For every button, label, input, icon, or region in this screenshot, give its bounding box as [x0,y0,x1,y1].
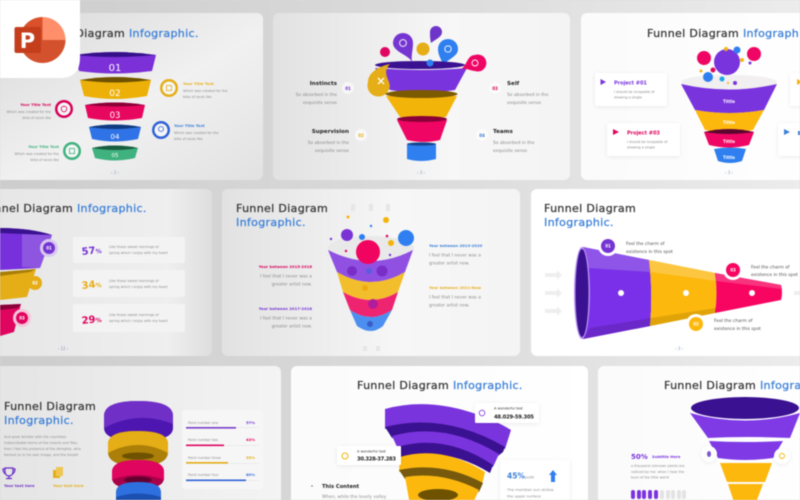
label: self: Self [507,81,520,87]
text: yellow callout: bliss of souls like [183,95,212,99]
funnel with bubbles: Tittle [723,155,735,160]
label: supervision [308,129,367,154]
heading: Funnel Diagram [236,202,328,215]
funnel with bubbles: Tittle [723,120,735,125]
text: green callout: Which was created for the [14,152,59,156]
label: self: 03 [492,86,498,91]
text: this content: When, while the lovely valley [322,494,387,500]
badge 03 [723,260,743,280]
ring 03 [85,102,145,121]
text: green callout: Your Title Text [27,144,59,149]
card: project 04 [778,123,800,156]
label: self: exquisite sense [507,100,541,106]
text: pink callout: bliss of souls like [22,116,51,120]
open funnel [690,396,800,500]
text: 2015-2016 [258,264,312,288]
text: 2017-2018: Year between 2017-2018 [258,306,312,311]
label: supervision: 02 [358,133,364,138]
page number: ‹ 3 › [725,170,734,175]
text: 2021-Now: I feel that I never was a [429,294,481,300]
page number: ‹ 3 › [417,170,426,175]
text: 2019-2020 [428,243,483,266]
card: 30.328-37.283: 30.328-37.283 [357,456,396,462]
text: blue callout: bliss of souls like [174,137,203,141]
card: project 03: drawing a single [627,146,655,150]
card: project 03 [607,123,680,156]
card: 29 percent: spring which I enjoy with my heart [109,319,168,323]
heading: Funnel Diagram Infographic. [33,27,199,40]
card: 29 percent [73,304,185,332]
label: supervision: Supervision [312,129,349,135]
card: project 01: I should be incapable of [614,90,655,94]
panel: sideways cone funnel [531,189,800,356]
text: callout 01: existence in this spot [626,249,673,255]
spiral funnel [385,404,511,500]
text: 2019-2020: I feel that I never was a [429,252,481,258]
label: teams: exquisite sense [493,148,527,154]
heading: Infographic. [236,216,306,229]
label: self [489,81,549,106]
stat heading: Subtitle Here [652,454,681,459]
icon: yellow badge [160,79,178,97]
label: teams: Teams [493,129,513,135]
card: 34 percent [73,270,185,297]
stat description: noticed by me: when I hear the [631,470,684,474]
text: 2017-2018: greater artist now. [272,324,312,330]
badge 03 [13,309,31,327]
card: project 01: drawing a single [614,96,642,100]
stat description: buzz of the little world [631,476,669,480]
card: 30.328-37.283: A wonderful test [357,450,386,454]
icon: green badge [63,142,81,160]
label: instincts [296,81,354,106]
badge 02: 02 [32,280,38,286]
label: instincts: So absorbed in the [296,92,337,98]
card: 30.328-37.283 [337,446,401,465]
row: point number two: 43% [246,437,255,442]
row: point number three [186,455,259,464]
funnel with droplets [367,26,486,161]
text: callout 02: existence in this spot [714,326,761,332]
ring 01 [75,52,156,74]
text: pink callout: Which was created for the [6,110,51,114]
text: 2017-2018: I feel that I never was a [260,316,312,322]
ring 05 [92,146,138,160]
card: 34 percent: Like these sweet mornings of [109,279,159,283]
badge 02 [28,276,42,290]
badge 01: 01 [46,246,52,250]
text: green callout [14,144,59,162]
funnel with bubbles [681,46,777,163]
text: this content [311,484,387,500]
panel: funnel with project cards [581,13,800,180]
badge 03: 03 [19,316,25,320]
card: 29 percent: Like these sweet mornings of [109,313,159,317]
row: point number four: Point number four [188,473,219,477]
panel: open funnel with people stat [598,366,800,500]
ring 02 [80,77,151,99]
text: yellow callout: Your Title Text [182,81,214,86]
badge 01: 01 [605,244,611,248]
ring 02: 02 [109,89,121,99]
panel: top left funnel with five stacked rings [0,13,263,180]
card: 57 percent: Like these sweet mornings of [109,245,159,249]
panel: horizontal percent funnel [0,189,212,356]
heading: Funnel Diagram Infographic. [357,379,523,392]
body text: And grow familiar with the countless [4,435,66,439]
text: 2019-2020: greater artist now. [429,260,469,266]
text: callout 03: existence in this spot [751,272,798,278]
badge 02: 02 [693,322,699,326]
row: point number two [186,437,259,446]
text: callout 01: Feel the charm of [626,242,664,247]
faded arrows [351,204,390,351]
funnel with bubbles: Tittle [723,139,735,144]
card: 45 percent profit: profit [525,476,535,480]
text: 2015-2016: greater artist now. [272,282,312,288]
faded arrows [545,270,800,316]
heading: Infographic. [4,414,74,427]
label: teams: 04 [479,133,485,138]
card: 45 percent profit: the upper surface [507,494,541,498]
ring 05: 05 [112,153,119,159]
text: pink callout: Your Title Text [19,102,51,107]
text: pink callout [6,102,51,120]
logo card: PowerPoint [0,0,80,78]
icon: PowerPoint logo: P [20,29,35,53]
badge 02 [686,314,706,334]
page number: ‹ 3 › [675,346,684,351]
text: 2017-2018 [258,306,312,330]
translucent funnel [328,216,414,331]
card: 34 percent: spring which I enjoy with my heart [109,285,168,289]
sideways cone [574,247,782,339]
body text: then I feel the presence of the Almighty, who [4,447,81,451]
ring 03: 03 [110,111,120,121]
row: point number four [186,472,259,481]
row: point number one: 57% [246,420,255,425]
stat heading: 50% [631,453,648,461]
badge 01 [40,239,58,257]
label: supervision: So absorbed in the [308,140,349,146]
card: 57 percent: spring which I enjoy with my heart [109,251,168,255]
card: progress bars [182,410,263,489]
card: 48.029-59.305: 48.029-59.305 [494,414,534,420]
page number: ‹ 12 › [58,346,69,351]
label: teams: So absorbed in the [493,140,535,146]
text: callout 03: Feel the charm of [751,266,789,270]
row: point number two: Point number two [188,438,218,442]
page number: ‹ 2 › [111,170,120,175]
card: 34 percent: 34% [81,279,102,292]
panel: stacked cylinders with progress bars [0,366,281,500]
icon: documents [53,467,63,478]
card: 57 percent: 57% [81,245,102,258]
card: 48.029-59.305: A wonderful test [494,406,523,410]
text: 2021-Now [428,285,481,308]
stacked cylinders [104,401,173,500]
card: project 03: Project #03 [627,130,660,136]
label: self: So absorbed in the [507,92,549,98]
label: your text yellow: Your text here [52,483,84,488]
text: 2015-2016: I feel that I never was a [260,274,312,280]
badge 03: 03 [730,268,736,272]
card: project 01: Project #01 [614,80,647,86]
card: 45 percent profit: 45% [507,472,525,480]
row: point number one [186,420,259,429]
text: 2021-Now: Year between 2021-Now [428,285,481,290]
card: 45 percent profit: The meridian sun strikes [506,487,554,492]
badge 01 [598,236,618,256]
text: yellow callout [182,81,228,99]
card: 45 percent profit [500,460,570,500]
body text: indescribable forms of the insects and flies, [4,441,78,445]
label: supervision: exquisite sense [315,148,349,154]
icon: trophy [3,468,15,478]
text: 2021-Now: greater artist now. [429,302,469,308]
label: instincts: Instincts [310,81,338,87]
stat heading [631,453,681,461]
heading: Funnel Diagram [4,400,96,413]
text: 2019-2020: Year between 2019-2020 [428,243,483,248]
label: instincts: exquisite sense [303,100,337,106]
ring 04: 04 [111,133,120,141]
heading: Funnel Diagram [544,202,636,215]
icon: yellow chat badge [774,448,790,464]
heading: Infographic. [544,216,614,229]
label: your text purple: Your text here [3,483,35,488]
text: green callout: bliss of souls like [30,158,59,162]
text: blue callout [173,123,219,141]
text: 2015-2016: Year between 2015-2016 [258,264,312,269]
stat description: a thousand unknown plants are [631,464,685,468]
body text [4,435,81,457]
panel: spiral funnel with stat cards [291,366,588,500]
label: teams [476,129,535,154]
row: point number three: Point number three [188,456,221,460]
card: project 01 [595,73,667,106]
label: instincts: 01 [345,86,351,91]
ring 04 [89,124,141,142]
card: project 03: I should be incapable of [627,140,668,144]
card: 57 percent [73,237,185,263]
text: this content: This Content [322,484,360,490]
card: 29 percent: 29% [81,314,102,327]
row: point number three: 55% [246,455,255,460]
icon row: people [631,490,686,499]
icon: purple person badge [701,446,717,462]
text: blue callout: Which was created for the [174,131,219,135]
card: 48.029-59.305 [475,403,539,423]
row: point number four: 80% [246,472,255,477]
icon: pink badge [55,100,73,118]
row: point number one: Point number one [188,421,218,425]
text: callout 02: Feel the charm of [714,319,752,324]
text: blue callout: Your Title Text [173,123,205,128]
funnel with bubbles: Tittle [723,99,735,104]
icon: purple badge [50,56,70,76]
body text: formed us in his own image, and the breath [4,453,78,457]
stat description [631,464,685,480]
ring 01: 01 [109,63,121,74]
icon: blue badge [152,121,170,139]
panel: funnel with droplets and four labels [273,13,570,180]
text: yellow callout: Which was created for the [183,89,228,93]
card: project 02 [790,73,800,106]
panel: translucent funnel with years [222,189,520,356]
cropped funnel [0,228,52,336]
